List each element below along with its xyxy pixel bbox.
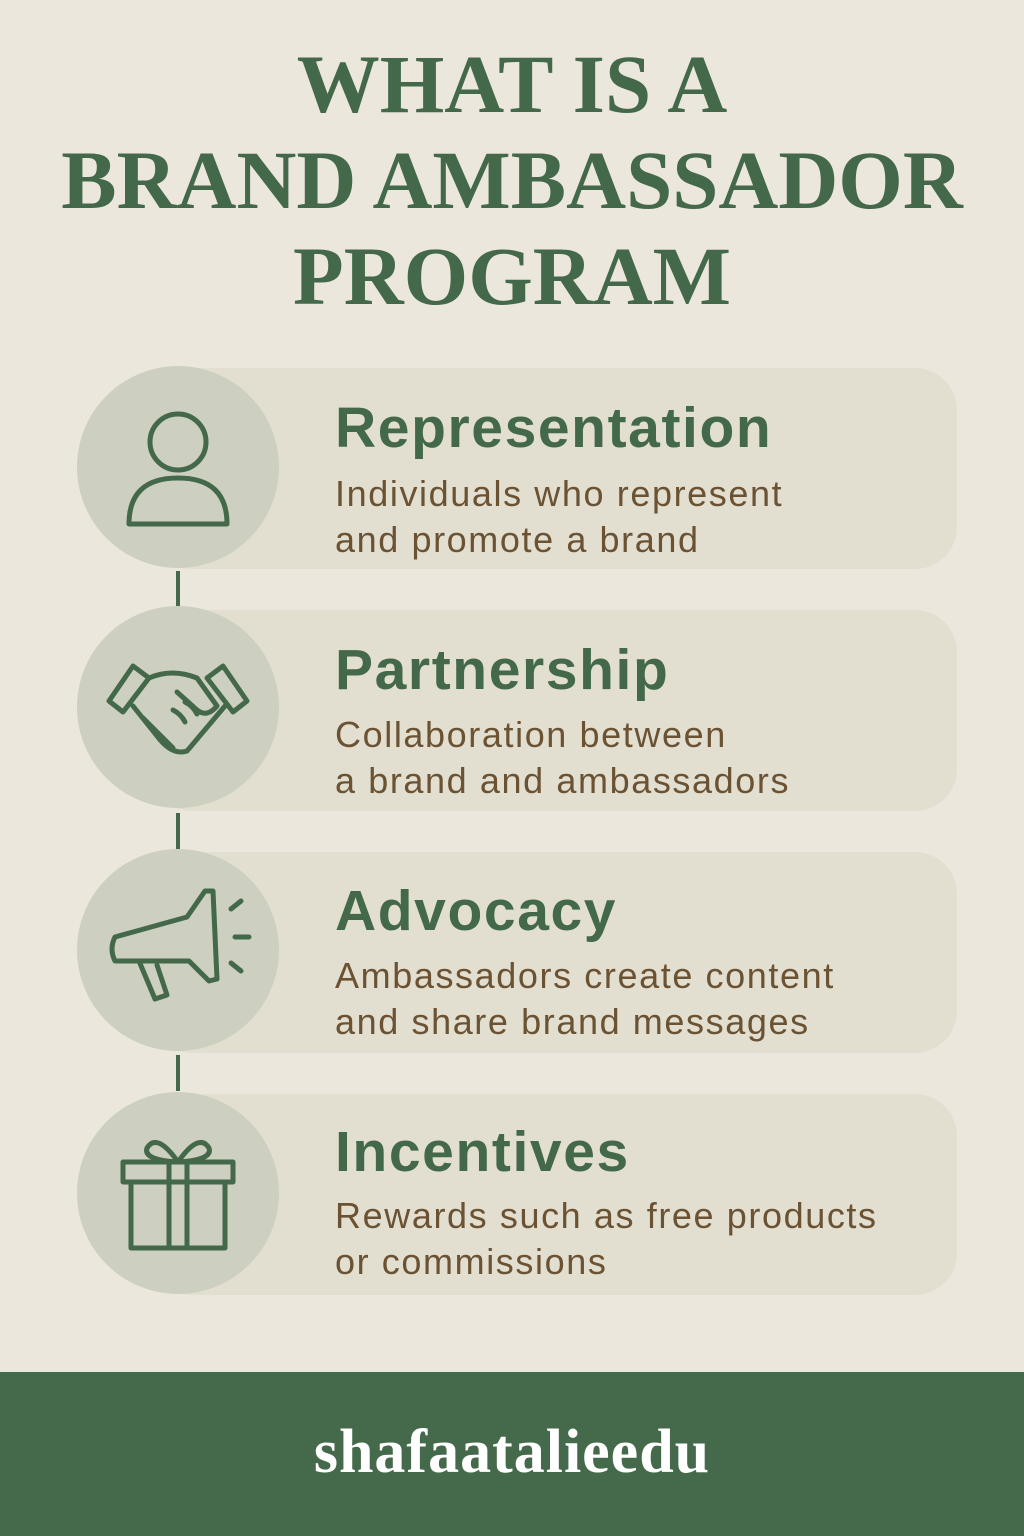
footer: shafaatalieedu xyxy=(314,1418,710,1486)
text: advocacy: Ambassadors create content xyxy=(335,955,835,996)
title xyxy=(61,38,964,322)
heading: representation: Representation xyxy=(335,396,772,460)
title: BRAND AMBASSADOR xyxy=(61,134,963,226)
text: representation: Individuals who represent xyxy=(335,473,783,514)
panel: partnership xyxy=(150,610,957,811)
footer xyxy=(0,1372,1024,1536)
title: WHAT IS A xyxy=(297,38,727,130)
icon: person xyxy=(77,366,279,568)
text: incentives: Rewards such as free products xyxy=(335,1195,878,1236)
text: incentives: or commissions xyxy=(335,1241,607,1282)
icon: handshake xyxy=(77,606,279,808)
panel: advocacy xyxy=(150,852,957,1053)
heading: incentives: Incentives xyxy=(335,1120,630,1184)
icon: gift xyxy=(77,1092,279,1294)
panel: incentives xyxy=(150,1094,957,1295)
title: PROGRAM xyxy=(293,230,731,322)
panel: representation xyxy=(150,368,957,569)
text: representation xyxy=(335,473,783,560)
heading: partnership: Partnership xyxy=(335,638,669,702)
text: partnership: Collaboration between xyxy=(335,714,727,755)
text: partnership xyxy=(335,714,790,801)
text: partnership: a brand and ambassadors xyxy=(335,760,790,801)
connector lines xyxy=(176,571,180,1091)
text: advocacy xyxy=(335,955,835,1042)
text: representation: and promote a brand xyxy=(335,519,700,560)
text: advocacy: and share brand messages xyxy=(335,1001,810,1042)
heading: advocacy: Advocacy xyxy=(335,879,617,943)
icon: megaphone xyxy=(77,849,279,1051)
text: incentives xyxy=(335,1195,878,1282)
